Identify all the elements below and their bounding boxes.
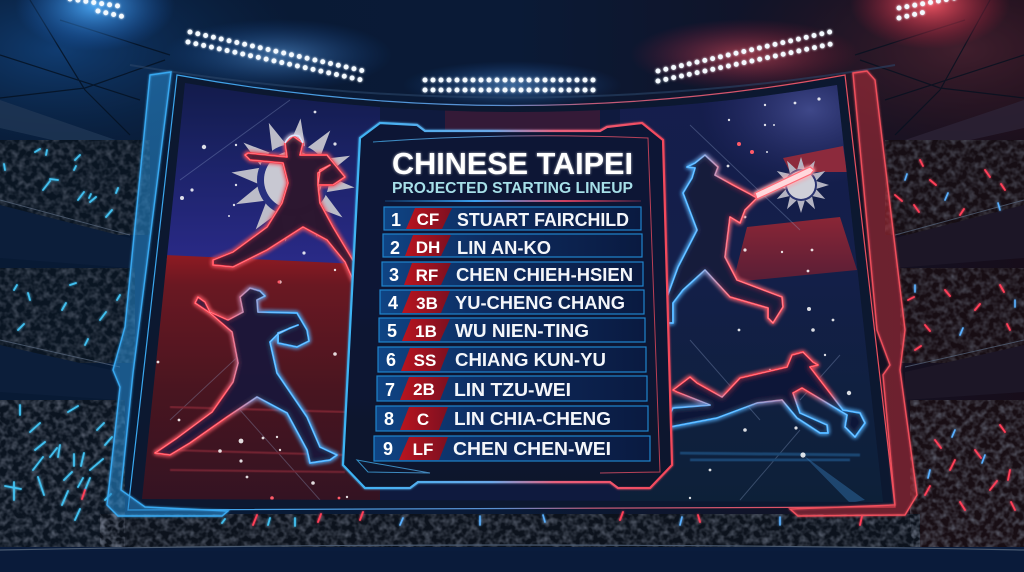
row 1 — [384, 207, 641, 230]
row 4: YU-CHENG CHANG — [455, 293, 625, 313]
row 6: SS — [414, 351, 436, 370]
panel frame — [343, 123, 672, 488]
row 3 — [382, 262, 643, 286]
crowd tiers — [0, 140, 1024, 548]
row 1: 1 — [391, 210, 401, 230]
row 8 — [376, 406, 648, 431]
row 5: WU NIEN-TING — [455, 321, 589, 341]
row 3: CHEN CHIEH-HSIEN — [456, 265, 633, 285]
glow sticks — [4, 149, 1015, 526]
player silhouette: batter — [666, 155, 814, 323]
row 5: 1B — [415, 322, 437, 341]
row 6: CHIANG KUN-YU — [455, 350, 606, 370]
light streaks — [170, 100, 860, 500]
right flag — [733, 146, 857, 282]
row 3: RF — [416, 266, 438, 285]
row 7: 2B — [413, 380, 435, 399]
bat — [755, 167, 814, 199]
railing and bottom wall — [0, 545, 1024, 572]
row 2: DH — [416, 238, 440, 257]
row 2: 2 — [390, 238, 400, 258]
row 9: CHEN CHEN-WEI — [453, 439, 611, 459]
row 5 — [379, 318, 645, 342]
stadium roof arc — [130, 65, 895, 98]
right pillar — [790, 71, 917, 516]
tier walls — [0, 200, 1024, 400]
row 4 — [380, 290, 644, 314]
screen frame — [128, 75, 895, 510]
row 9: LF — [413, 440, 433, 459]
row 1: STUART FAIRCHILD — [457, 210, 629, 230]
row 8: LIN CHIA-CHENG — [454, 409, 611, 429]
row 9: 9 — [383, 439, 393, 459]
row 7 — [377, 376, 647, 401]
row 7: LIN TZU-WEI — [454, 380, 571, 400]
row 7: 7 — [385, 380, 395, 400]
player silhouette: pitcher throwing — [155, 288, 337, 463]
row 3: 3 — [389, 265, 399, 285]
stars — [157, 97, 851, 499]
row 8: 8 — [384, 409, 394, 429]
row 2: LIN AN-KO — [457, 238, 551, 258]
row 5: 5 — [387, 321, 397, 341]
player silhouette: pitcher striding — [213, 135, 357, 280]
screen background — [142, 83, 883, 502]
subtitle: PROJECTED STARTING LINEUP — [392, 180, 633, 197]
player silhouette: diving fielder — [665, 352, 865, 437]
left pillar — [107, 72, 228, 516]
title: CHINESE TAIPEI — [392, 146, 633, 181]
left flag sun — [230, 117, 356, 243]
lineup panel — [343, 123, 672, 488]
row 2 — [383, 234, 642, 258]
row 6 — [378, 347, 646, 372]
row 4: 4 — [388, 293, 398, 313]
row 1: CF — [417, 210, 439, 229]
big screen — [107, 35, 920, 516]
row 6: 6 — [386, 350, 396, 370]
row 8: C — [417, 410, 429, 429]
row 9 — [374, 436, 650, 461]
row 4: 3B — [416, 294, 438, 313]
stadium lights — [15, 0, 1010, 109]
